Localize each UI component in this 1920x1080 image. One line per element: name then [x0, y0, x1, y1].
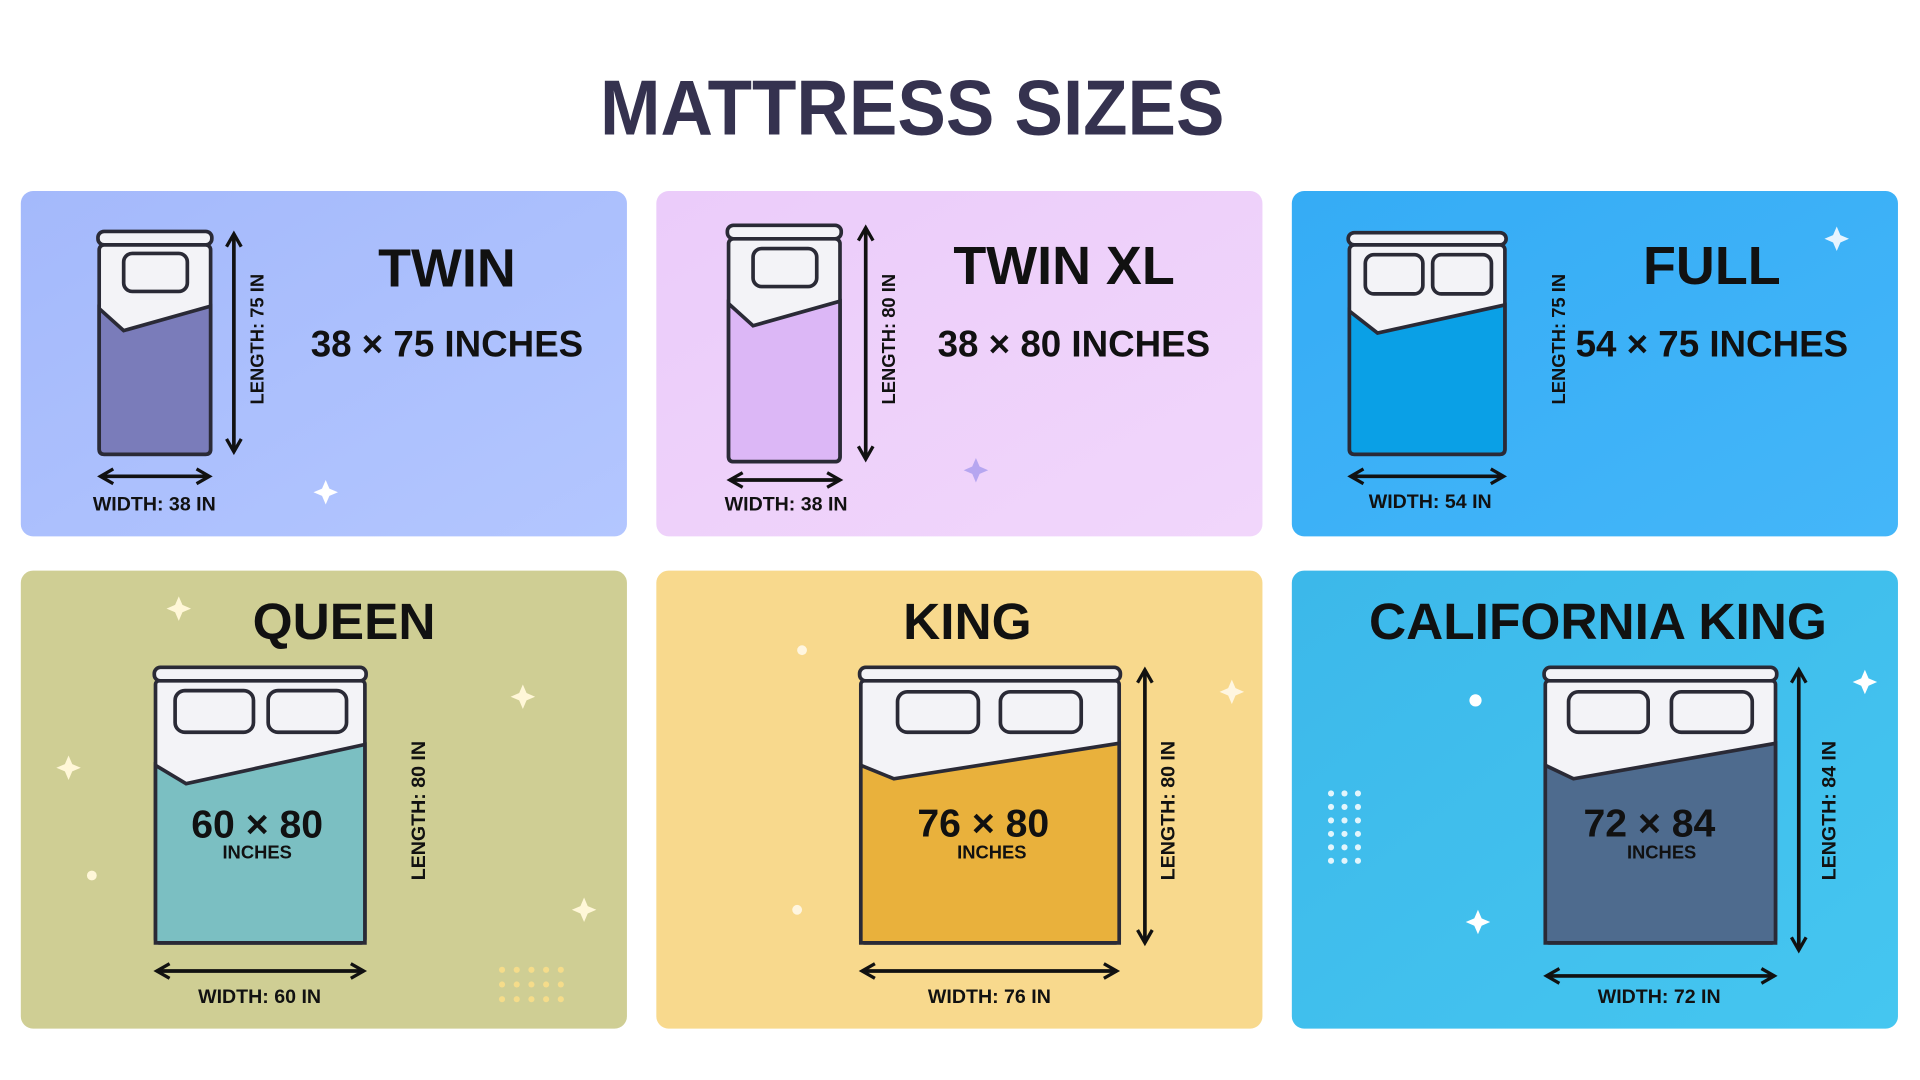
panel: queen [21, 571, 627, 1029]
label: queen length: LENGTH: 80 IN [408, 741, 430, 880]
title: MATTRESS SIZES [600, 64, 1224, 152]
text: california king size: 72 × 84 [1583, 802, 1715, 845]
panel: twin [21, 191, 627, 536]
icon: twin bed [98, 231, 212, 454]
icon: king bed [860, 667, 1120, 943]
icon: twin xl bed [727, 225, 841, 462]
label: king length: LENGTH: 80 IN [1157, 741, 1179, 880]
arrow: king width [862, 970, 1117, 973]
heading: california king: CALIFORNIA KING [1369, 592, 1827, 650]
arrow: full width [1351, 475, 1504, 478]
text: queen size: 60 × 80 [191, 804, 323, 847]
text: king inches: INCHES [957, 841, 1027, 862]
label: queen width: WIDTH: 60 IN [198, 986, 321, 1008]
label: twin xl width: WIDTH: 38 IN [725, 494, 848, 516]
text: full size: 54 × 75 INCHES [1576, 323, 1848, 364]
icon: sparkles [792, 645, 1244, 915]
label: full width: WIDTH: 54 IN [1369, 491, 1492, 513]
text: queen inches: INCHES [222, 841, 292, 862]
text: twin xl size: 38 × 80 INCHES [938, 323, 1210, 364]
icon: sparkle [964, 458, 988, 482]
arrow: twin width [100, 475, 209, 478]
icon: sparkle [313, 480, 338, 504]
icon: full bed [1348, 233, 1506, 454]
icon: california king bed [1544, 667, 1777, 943]
text: king size: 76 × 80 [917, 802, 1049, 845]
heading: full: FULL [1643, 236, 1781, 296]
panel: california king [1292, 571, 1898, 1029]
arrow: twin length [232, 234, 235, 452]
icon: sparkle [1824, 227, 1849, 251]
arrow: twin xl width [730, 478, 840, 482]
heading: twin xl: TWIN XL [953, 236, 1175, 296]
panel: full [1292, 191, 1898, 536]
text: twin size: 38 × 75 INCHES [311, 323, 583, 364]
arrow: queen width [157, 970, 364, 973]
panel: twin xl [656, 191, 1262, 536]
icon: sparkles [56, 596, 596, 922]
label: king width: WIDTH: 76 IN [928, 986, 1051, 1008]
label: twin xl length: LENGTH: 80 IN [878, 274, 899, 404]
label: full length: LENGTH: 75 IN [1548, 274, 1569, 404]
arrow: twin xl length [864, 228, 867, 459]
label: twin width: WIDTH: 38 IN [93, 494, 216, 516]
icon: dot grid [499, 967, 564, 1002]
label: california king length: LENGTH: 84 IN [1819, 741, 1841, 880]
arrow: california king width [1547, 974, 1774, 977]
icon: queen bed [154, 667, 366, 943]
arrow: king length [1143, 670, 1146, 943]
heading: king: KING [903, 592, 1032, 650]
label: twin length: LENGTH: 75 IN [246, 274, 267, 404]
label: california king width: WIDTH: 72 IN [1598, 986, 1721, 1008]
panel: king [656, 571, 1262, 1029]
icon: sparkles and dots [1328, 670, 1877, 934]
text: california king inches: INCHES [1627, 841, 1696, 862]
heading: twin: TWIN [378, 239, 516, 299]
arrow: california king length [1797, 670, 1800, 950]
heading: queen: QUEEN [253, 592, 435, 650]
